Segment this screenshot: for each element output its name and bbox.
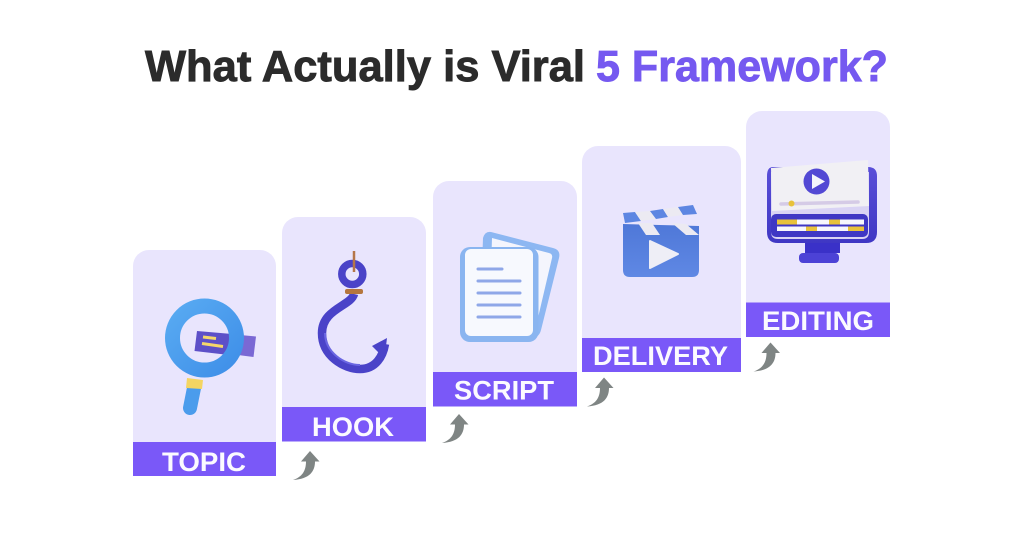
title: [145, 42, 888, 91]
label: script: SCRIPT: [454, 376, 555, 406]
label: editing: EDITING: [762, 306, 874, 336]
icon: script pages: [460, 232, 559, 342]
arrow: script to delivery: [587, 378, 614, 406]
arrow: topic to hook: [293, 451, 320, 480]
icon: video editing monitor: [767, 160, 877, 263]
label: delivery: DELIVERY: [593, 341, 728, 371]
icon: clapperboard: [623, 205, 699, 277]
arrow: hook to script: [442, 414, 468, 443]
icon: hook: [322, 251, 387, 369]
title: 5 Framework?: [596, 42, 888, 91]
panel: editing: [746, 111, 890, 337]
label: hook: HOOK: [312, 412, 395, 442]
title: What Actually is Viral: [145, 42, 585, 91]
panel: delivery: [582, 146, 741, 372]
panel: script: [433, 181, 577, 406]
label: topic: TOPIC: [162, 447, 246, 477]
arrow: delivery to editing: [754, 342, 780, 372]
label: script: [433, 372, 577, 406]
icon: magnifying glass: [172, 306, 256, 408]
label: topic: [133, 442, 276, 477]
label: hook: [282, 407, 426, 442]
label: editing: [746, 302, 890, 337]
panel: topic: [133, 250, 276, 477]
panel: hook: [282, 217, 426, 442]
